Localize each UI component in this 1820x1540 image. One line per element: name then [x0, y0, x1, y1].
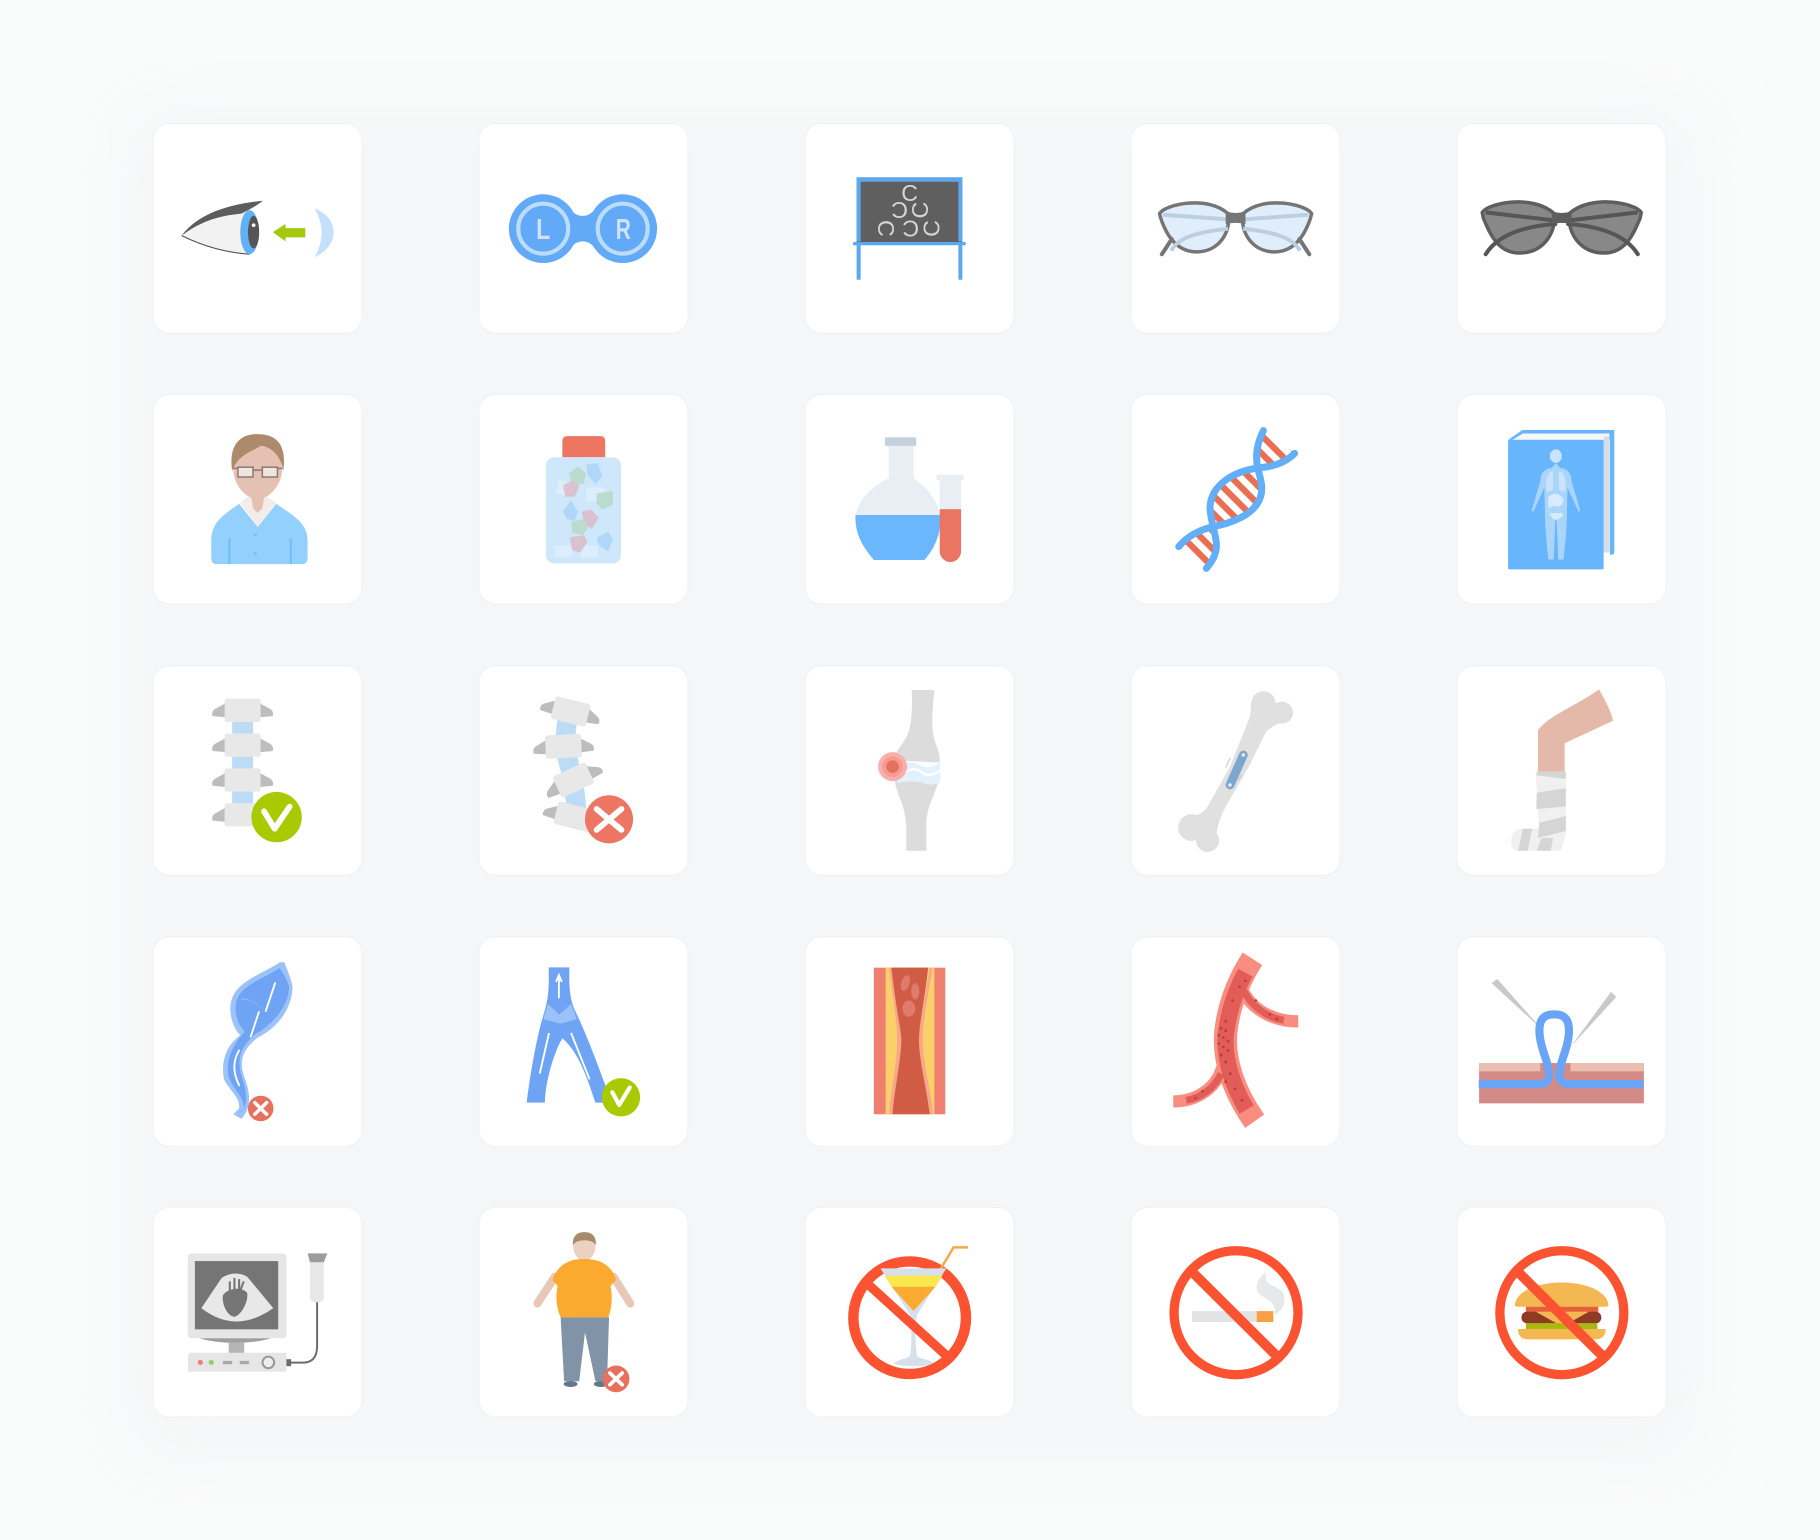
icon: vein surgery [1479, 979, 1644, 1103]
panel: no alcohol [805, 1207, 1014, 1417]
panel: vein surgery [1457, 937, 1666, 1146]
icon: varicose vein [223, 962, 292, 1121]
panel: no junk food [1457, 1207, 1666, 1417]
icon: overweight man [537, 1232, 630, 1392]
icon: no junk food [1500, 1251, 1624, 1375]
icon: anatomy book [1508, 430, 1614, 569]
icon: no alcohol [853, 1247, 968, 1374]
icon: eye chart: C [901, 180, 918, 206]
icon: pill bottle [546, 436, 621, 563]
icon: contact lens case [509, 194, 657, 263]
panel: healthy vein [479, 937, 688, 1146]
label L: L [536, 213, 550, 246]
icon: ultrasound machine [188, 1253, 327, 1372]
inflammation [878, 752, 907, 781]
plate [1226, 753, 1245, 787]
icon: eye chart: C [902, 215, 919, 241]
panel: no smoking [1131, 1207, 1340, 1417]
panel: eyeglasses [1131, 123, 1340, 333]
panel: pill bottle [479, 395, 688, 604]
icon: eye chart: C [919, 220, 945, 237]
icon: doctor with glasses [211, 434, 308, 564]
label R: R [616, 214, 631, 246]
badge: cross [585, 795, 633, 843]
icon: sunglasses [1482, 202, 1641, 254]
arrow: green [273, 224, 305, 241]
panel: anatomy book [1457, 395, 1666, 604]
icon: eye chart: C [891, 197, 908, 223]
panel: doctor [153, 395, 362, 604]
icon: DNA helix [1178, 431, 1295, 569]
icon: fractured bone with plate [1178, 691, 1293, 852]
panel: blood vessel [1131, 937, 1340, 1146]
icon: flask and test tube [855, 437, 964, 562]
icon: eye chart: C [873, 220, 899, 237]
icon: eye with contact lens [182, 201, 334, 257]
panel: lab flask [805, 395, 1014, 604]
panel: eye chart [805, 123, 1014, 333]
icon: healthy spine [212, 699, 302, 842]
icon: no smoking [1174, 1251, 1298, 1375]
panel: sunglasses [1457, 123, 1666, 333]
lens crescent [315, 208, 334, 257]
panel: contact lens case [479, 123, 688, 333]
badge: cross [248, 1096, 273, 1121]
icon: narrowed artery [874, 968, 945, 1114]
icon: eye chart [853, 177, 966, 280]
panel: knee joint [805, 666, 1014, 875]
panel: varicose vein [153, 937, 362, 1146]
panel: healthy spine [153, 666, 362, 875]
panel: overweight man [479, 1207, 688, 1417]
icon: inflamed knee joint [878, 690, 940, 851]
icon: bandaged leg [1511, 689, 1613, 851]
panel: bone with plate [1131, 666, 1340, 875]
panel: eye lens [153, 123, 362, 333]
badge: cross [603, 1366, 629, 1392]
icon: eye chart: C [907, 202, 933, 218]
icon: healthy vein [527, 967, 640, 1116]
icon: damaged spine [532, 693, 633, 843]
panel: ultrasound [153, 1207, 362, 1417]
badge: check [602, 1078, 640, 1116]
panel: curved spine [479, 666, 688, 875]
panel: DNA [1131, 395, 1340, 604]
human figure [1532, 449, 1580, 559]
panel: narrowed artery [805, 937, 1014, 1146]
icon: eyeglasses [1160, 203, 1312, 254]
badge: check [251, 792, 302, 842]
panel: bandaged leg [1457, 666, 1666, 875]
icon: branching blood vessel [1173, 959, 1298, 1121]
